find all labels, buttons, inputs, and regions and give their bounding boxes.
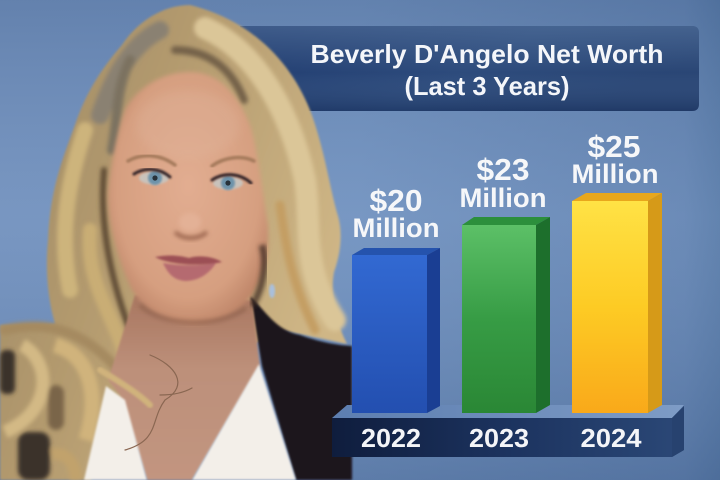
bar: 2024 <box>572 193 662 413</box>
neck and chest <box>108 295 260 480</box>
earring <box>269 284 275 298</box>
value label: 2023: Million <box>460 183 546 213</box>
lips <box>155 255 222 281</box>
portrait photo <box>0 5 352 480</box>
hair <box>0 5 347 480</box>
eyebrows <box>128 156 254 166</box>
bar: 2022 <box>352 248 440 413</box>
jacket <box>250 296 352 480</box>
nose <box>175 213 207 238</box>
chart base platform <box>332 405 684 457</box>
eyes <box>134 169 251 190</box>
face <box>108 72 268 324</box>
lower left curls <box>0 345 92 480</box>
title banner: (Last 3 Years) <box>404 71 570 101</box>
face edge shadow <box>252 245 264 306</box>
value label: 2022: Million <box>352 213 440 243</box>
value label: 2024: Million <box>572 159 658 189</box>
bar: 2023 <box>462 217 550 413</box>
value label: 2022 <box>352 183 440 243</box>
value label: 2024 <box>572 129 658 189</box>
title text: Beverly D'Angelo Net Worth <box>310 39 664 69</box>
forehead highlight <box>136 91 240 159</box>
loose hair strands over neck <box>100 355 192 450</box>
year label: 2022: 2022 <box>361 423 421 453</box>
value label: 2022: $20 <box>370 183 422 218</box>
chart: net worth bars <box>332 129 684 457</box>
value label: 2024: $25 <box>588 129 640 164</box>
year label: 2024: 2024 <box>580 423 642 453</box>
value label: 2023: $23 <box>476 152 530 187</box>
year label: 2023: 2023 <box>469 423 529 453</box>
value label: 2023 <box>460 152 546 213</box>
chin shadow <box>140 305 246 322</box>
white blouse <box>84 364 296 480</box>
title banner <box>240 26 699 111</box>
